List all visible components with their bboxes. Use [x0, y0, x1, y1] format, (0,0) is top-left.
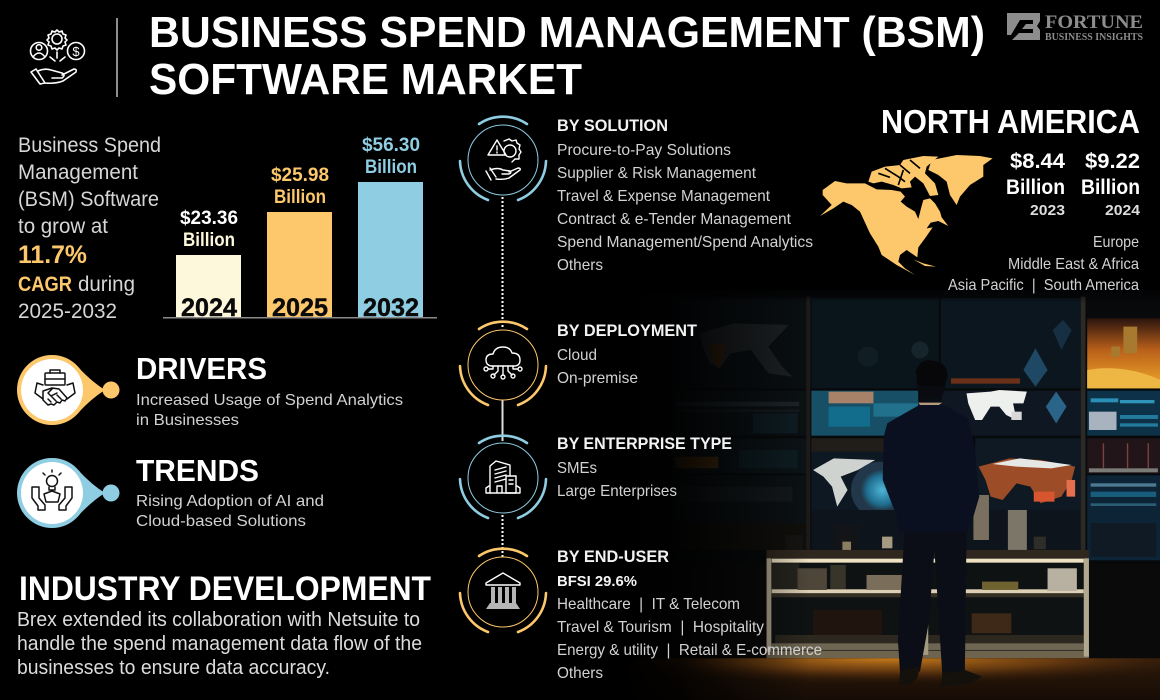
segment: by solution: BY SOLUTION	[557, 116, 668, 135]
segment: by enterprise type: BY ENTERPRISE TYPE	[557, 434, 732, 453]
growth summary text: (BSM) Software	[18, 188, 159, 211]
region title: North America: NORTH AMERICA	[881, 103, 1140, 140]
trends badge	[17, 458, 120, 528]
title: SOFTWARE MARKET	[149, 55, 582, 104]
north america values: Billion	[1081, 176, 1140, 199]
north america values: 2023	[1030, 203, 1065, 219]
other regions list: Europe	[1093, 234, 1139, 251]
segment: by enterprise type: Large Enterprises	[557, 483, 677, 500]
growth summary text: to grow at	[18, 215, 108, 238]
other regions list: Middle East & Africa	[1008, 256, 1139, 273]
other regions list: Asia Pacific | South America	[948, 277, 1139, 294]
bar chart: market size: 2025	[272, 294, 328, 322]
north america values	[1006, 150, 1140, 219]
map: North America and Greenland	[820, 155, 993, 275]
industry development: handle the spend management data flow of the	[17, 633, 422, 655]
growth summary text: Business Spend	[18, 134, 161, 157]
segment: by end-user: Travel & Tourism | Hospitality	[557, 619, 764, 636]
segment icon: enterprise type	[460, 436, 546, 518]
segment: by solution: Travel & Expense Management	[557, 188, 771, 205]
logo: Fortune Business Insights	[1007, 12, 1143, 43]
industry development: INDUSTRY DEVELOPMENT	[19, 570, 431, 608]
growth summary text: Management	[18, 161, 138, 184]
drivers text: Increased Usage of Spend Analytics	[136, 392, 403, 409]
segment: by enterprise type	[557, 434, 732, 500]
logo: Fortune Business Insights: FORTUNE	[1045, 12, 1143, 33]
segment: by deployment: Cloud	[557, 347, 597, 364]
segment: by enterprise type: SMEs	[557, 460, 597, 477]
logo: Fortune Business Insights: BUSINESS INSIGHTS	[1045, 32, 1143, 43]
shelf unit	[767, 550, 1089, 658]
bar chart: market size: Billion	[274, 187, 326, 208]
icon: handshake and briefcase	[35, 370, 75, 405]
title: BUSINESS SPEND MANAGEMENT (BSM)	[149, 8, 985, 57]
segment: by solution: Others	[557, 257, 603, 274]
segment: by solution: Spend Management/Spend Analytics	[557, 234, 813, 251]
drivers text	[136, 351, 403, 429]
segment: by end-user: Energy & utility | Retail & E-commerce	[557, 642, 822, 659]
bar chart: market size: Billion	[365, 157, 417, 178]
segment: by end-user: BFSI 29.6%	[557, 573, 637, 590]
trends text: TRENDS	[136, 453, 259, 488]
segment: by solution: Procure-to-Pay Solutions	[557, 142, 731, 159]
drivers badge	[17, 355, 120, 425]
industry development	[17, 570, 431, 679]
segment icon: deployment	[460, 322, 546, 405]
segment: by solution	[557, 116, 813, 274]
growth summary text: during	[78, 273, 135, 296]
segment: by deployment: On-premise	[557, 370, 638, 387]
segment: by end-user: Healthcare | IT & Telecom	[557, 596, 740, 613]
bar chart: market size	[163, 135, 437, 322]
growth summary text: CAGR	[18, 273, 72, 296]
trends text	[136, 453, 324, 530]
drivers text: DRIVERS	[136, 351, 267, 386]
growth summary text: 2025-2032	[18, 300, 117, 323]
industry development: businesses to ensure data accuracy.	[17, 657, 330, 679]
background photo: man facing wall of data screens	[620, 285, 1160, 700]
trends text: Cloud-based Solutions	[136, 513, 306, 530]
north america values: $9.22	[1085, 150, 1140, 173]
bar chart: market size: $23.36	[180, 208, 238, 229]
north america values: $8.44	[1010, 150, 1065, 173]
drivers text: in Businesses	[136, 412, 239, 429]
growth summary text: 11.7%	[18, 241, 87, 269]
north america values: 2024	[1105, 203, 1140, 219]
other regions list	[948, 234, 1139, 294]
segment: by solution: Supplier & Risk Management	[557, 165, 757, 182]
segment: by solution: Contract & e-Tender Management	[557, 211, 792, 228]
north america values: Billion	[1006, 176, 1065, 199]
man silhouette	[883, 360, 982, 687]
title	[149, 8, 985, 104]
bar chart: market size: $25.98	[271, 165, 329, 186]
segment icon: end-user	[460, 549, 546, 632]
bar chart: market size: $56.30	[362, 135, 420, 156]
industry development: Brex extended its collaboration with Netsuite to	[17, 609, 420, 631]
connector lines between segment icons	[502, 197, 504, 557]
segment: by deployment	[557, 321, 698, 387]
bar chart: market size: Billion	[183, 230, 235, 251]
icon: light bulb and hands	[32, 470, 72, 510]
header icon: hand holding people, gear and dollar: $	[72, 44, 80, 59]
segment icon: solution	[460, 117, 546, 200]
trends text: Rising Adoption of AI and	[136, 493, 324, 510]
segment: by end-user: BY END-USER	[557, 547, 669, 566]
segment: by deployment: BY DEPLOYMENT	[557, 321, 698, 340]
bar chart: market size: 2024	[181, 294, 237, 322]
segment: by end-user: Others	[557, 665, 603, 682]
growth summary text	[18, 134, 161, 323]
bar chart: market size: 2032	[363, 294, 419, 322]
segment: by end-user	[557, 547, 822, 682]
header icon: hand holding people, gear and dollar	[30, 30, 84, 84]
